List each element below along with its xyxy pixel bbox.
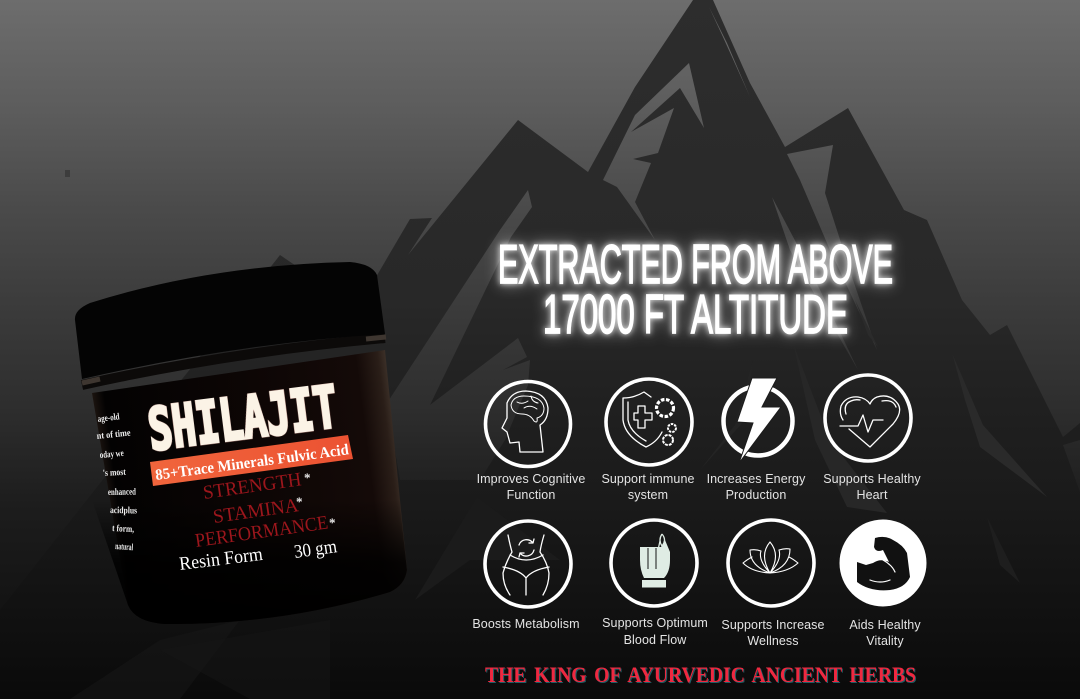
labels row two: Aids Healthy — [849, 618, 921, 632]
icon: blood flow hand — [611, 520, 697, 606]
labels row one: Supports Healthy — [823, 472, 921, 486]
asterisks: * — [304, 470, 310, 485]
icon: vitality muscle — [840, 520, 926, 606]
side label text: 's most — [103, 468, 127, 479]
title — [498, 233, 893, 345]
labels row one — [477, 472, 921, 502]
small mark — [65, 170, 70, 177]
icon: brain head — [486, 382, 570, 466]
labels row two: Blood Flow — [624, 633, 687, 647]
side label text: acidplus — [110, 506, 137, 516]
jar lid — [75, 262, 385, 379]
side label text: oday we — [99, 449, 124, 461]
product jar — [75, 262, 407, 624]
labels row one: Support immune — [601, 472, 695, 486]
orange band — [150, 435, 353, 486]
band text: 85+Trace Minerals Fulvic Acid — [154, 441, 350, 484]
side label text: enhanced — [108, 488, 137, 498]
side label text: age-old — [97, 412, 121, 425]
strength words — [194, 469, 329, 552]
jar body — [92, 350, 407, 624]
icon: energy bolt — [724, 378, 792, 463]
labels row one: Function — [507, 488, 555, 502]
weight: 30 gm — [293, 536, 338, 563]
strength words: STAMINA — [212, 495, 300, 528]
labels row two: Wellness — [747, 634, 799, 648]
labels row one: Heart — [856, 488, 888, 502]
labels row one: system — [628, 488, 668, 502]
labels row two: Boosts Metabolism — [472, 617, 580, 631]
labels row one: Increases Energy — [707, 472, 806, 486]
labels row two: Supports Optimum — [602, 616, 708, 630]
side label text — [96, 412, 137, 553]
side label text: t form, — [112, 524, 135, 535]
asterisks: * — [296, 494, 302, 509]
jar neck ring — [82, 338, 385, 385]
title: 17000 FT ALTITUDE — [543, 283, 848, 345]
labels row one: Production — [726, 488, 786, 502]
asterisks — [296, 470, 336, 530]
labels row two — [472, 616, 921, 648]
resin form: Resin Form — [178, 544, 264, 575]
asterisks: * — [329, 515, 336, 530]
labels row one: Improves Cognitive — [477, 472, 585, 486]
side label text: natural — [115, 542, 134, 553]
strength words: STRENGTH — [202, 469, 303, 504]
icon: immune shield — [606, 379, 692, 465]
side label text: nt of time — [96, 428, 131, 442]
tagline: THE KING OF AYURVEDIC ANCIENT HERBS — [485, 662, 916, 687]
strength words: PERFORMANCE — [194, 513, 329, 552]
labels row two: Vitality — [866, 634, 904, 648]
icon: healthy heart — [825, 375, 911, 461]
labels row two: Supports Increase — [721, 618, 825, 632]
icon: wellness lotus — [728, 520, 814, 606]
product name: SHILAJIT — [144, 374, 341, 464]
icon: metabolism waist — [485, 521, 571, 607]
